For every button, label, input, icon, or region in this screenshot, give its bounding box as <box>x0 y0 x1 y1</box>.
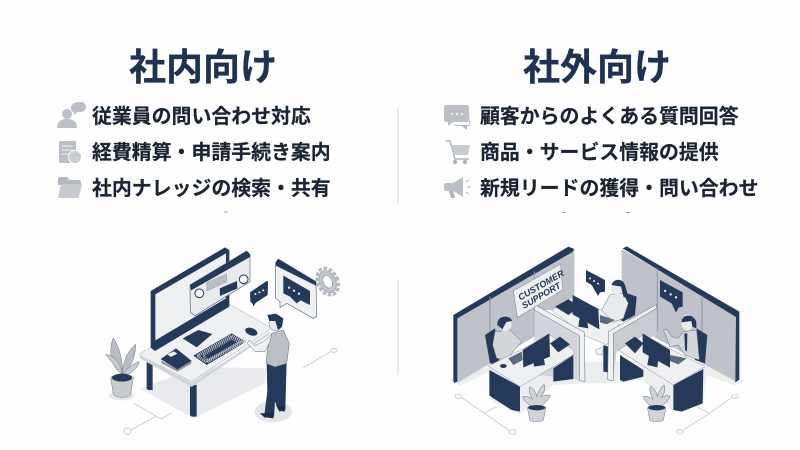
heading: external: 社外向け <box>523 47 671 88</box>
person <box>247 314 292 422</box>
chat bubble: right <box>660 280 683 313</box>
text: external item 3: 新規リードの獲得・問い合わせ <box>480 178 758 200</box>
sign: customer support <box>513 264 566 318</box>
potted plant: right <box>643 385 670 422</box>
icon: person with speech bubble <box>57 102 86 128</box>
desk shadow <box>140 367 267 418</box>
desk <box>140 303 272 417</box>
left desk <box>488 333 574 412</box>
text: external item 1: 顧客からのよくある質問回答 <box>480 106 739 128</box>
agent at back desk <box>552 280 637 372</box>
book <box>161 348 192 372</box>
icon: shopping cart <box>446 141 470 164</box>
text: internal item 3: 社内ナレッジの検索・共有 <box>92 178 331 200</box>
floor shadow <box>448 362 745 415</box>
text: internal item 1: 従業員の問い合わせ対応 <box>92 106 311 128</box>
floor connector lines <box>124 348 337 435</box>
agent at left desk <box>485 315 522 365</box>
illustration: customer support cubicles <box>448 246 745 434</box>
mouse <box>244 326 259 337</box>
center-back cubicle panels <box>534 304 657 382</box>
left partition wall <box>453 247 574 383</box>
icon: megaphone <box>444 177 471 198</box>
text: internal item 2: 経費精算・申請手続き案内 <box>92 142 331 164</box>
sign: customer support: CUSTOMER <box>516 268 566 302</box>
heading: internal: 社内向け <box>129 47 277 88</box>
potted plant <box>106 338 139 400</box>
browser window with chat <box>276 259 317 318</box>
icon: folder <box>58 177 82 198</box>
gear <box>313 265 343 299</box>
illustration: person at desk with computer <box>106 247 343 435</box>
pop-up window on monitor <box>190 251 250 316</box>
text: external item 2: 商品・サービス情報の提供 <box>480 142 719 164</box>
agent at right desk <box>663 315 707 363</box>
right desk <box>618 333 705 412</box>
keyboard <box>193 333 246 365</box>
icon: chat bubbles <box>444 105 470 130</box>
chat bubble <box>250 281 268 306</box>
chat bubble: back <box>586 270 605 296</box>
sign: customer support: SUPPORT <box>520 280 564 311</box>
potted plant: left <box>523 384 550 422</box>
right partition wall <box>622 246 739 382</box>
monitor <box>151 247 229 351</box>
icon: document with coin <box>59 141 82 164</box>
floor connector lines <box>455 394 738 434</box>
